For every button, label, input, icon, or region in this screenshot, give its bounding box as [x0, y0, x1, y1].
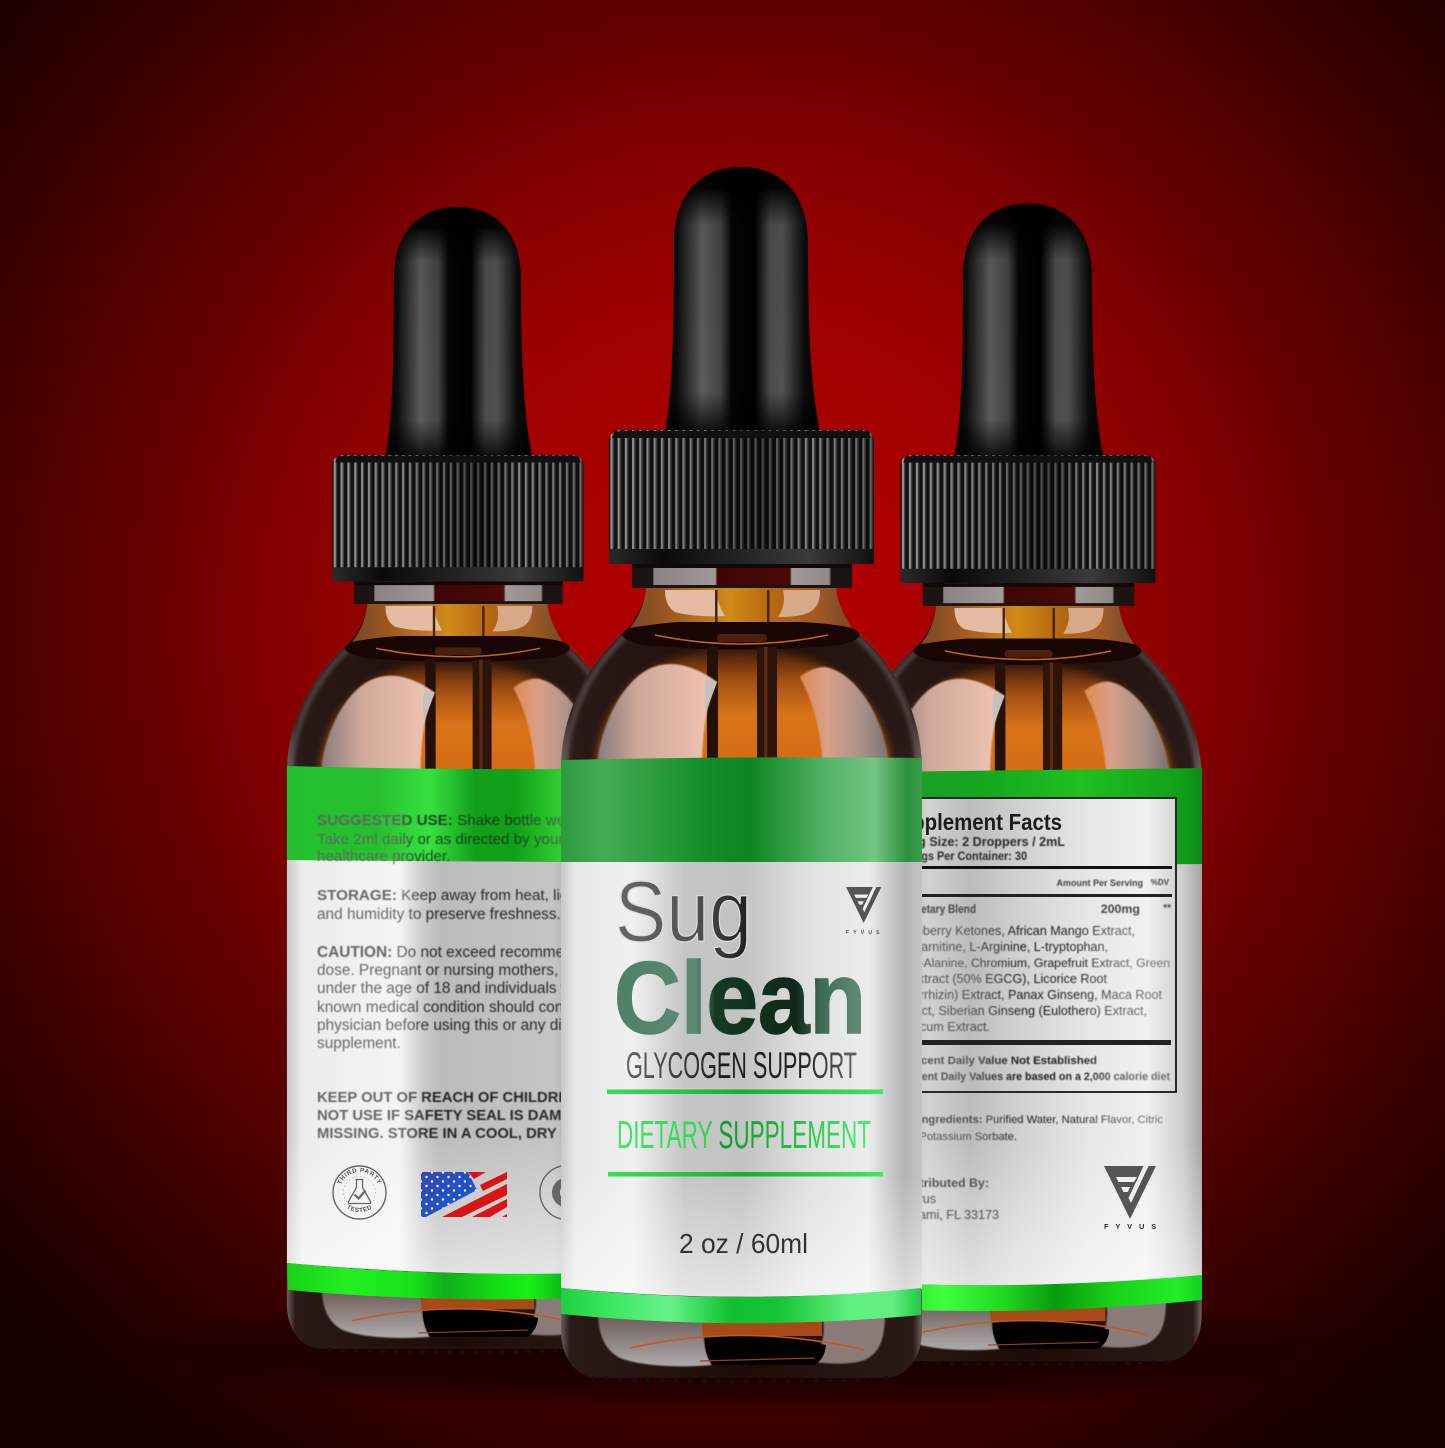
warning text: KEEP OUT OF REACH OF CHILDREN. DO — [317, 1090, 609, 1106]
center label: white body — [561, 862, 922, 1297]
product name: Sug: Sug — [615, 864, 752, 960]
subtitle: glycogen support: GLYCOGEN SUPPORT — [626, 1045, 857, 1086]
bottle: left, back label — [286, 207, 631, 1354]
warning text: MISSING. STORE IN A COOL, DRY PLACE. — [317, 1126, 615, 1142]
warning text — [317, 1090, 631, 1142]
serving information: Servings Per Container: 30 — [888, 849, 1027, 863]
center label: bottom band — [561, 1288, 921, 1323]
center glass and dropper — [561, 167, 922, 1382]
blend row: Dietary Blend — [911, 902, 976, 916]
blend row — [911, 902, 1171, 916]
suggested use text: healthcare provider. — [317, 848, 450, 865]
right glass and dropper — [854, 204, 1202, 1365]
other ingredients: Other ingredients: Purified Water, Natural Flavor, Citric — [886, 1114, 1163, 1126]
bottle: center, front label — [561, 167, 922, 1382]
suggested use text: Take 2ml daily or as directed by your — [317, 831, 563, 848]
icon: third party tested badge: TESTED — [348, 1204, 372, 1212]
left label: white body — [287, 860, 590, 1274]
ingredient list — [884, 924, 1170, 1034]
volume: 2 oz / 60ml — [679, 1228, 808, 1259]
daily value notes: Percent Daily Values are based on a 2,000 calorie diet — [899, 1071, 1170, 1083]
icon: third party tested badge: THIRD PARTY — [337, 1168, 382, 1184]
brand logo — [1104, 1165, 1163, 1231]
icon: gmp badge — [540, 1166, 594, 1220]
icon: gmp badge: G — [559, 1182, 575, 1204]
product name: Clean: Clean — [614, 941, 866, 1055]
distributor — [900, 1176, 999, 1222]
facts heading: Supplement Facts — [886, 809, 1062, 835]
ingredient list: Tea Extract (50% EGCG), Licorice Root — [886, 972, 1107, 986]
caution text: dose. Pregnant or nursing mothers, children — [317, 962, 616, 979]
left label: top band — [287, 766, 590, 862]
ingredient list: L-Carnitine, L-Arginine, L-tryptophan, — [901, 940, 1108, 954]
amount per serving header: Amount Per Serving — [1056, 878, 1143, 888]
distributor: Fyvus — [902, 1192, 936, 1206]
right label: bottom band — [880, 1275, 1202, 1311]
brand logo: FYVUS — [1104, 1222, 1163, 1231]
storage text: STORAGE: Keep away from heat, light — [317, 887, 582, 904]
serving information: Serving Size: 2 Droppers / 2mL — [880, 835, 1065, 849]
ingredient list: Beta-Alanine, Chromium, Grapefruit Extract, Green — [894, 956, 1170, 970]
suggested use text — [317, 812, 576, 865]
caution text — [317, 944, 616, 1052]
other ingredients — [886, 1114, 1163, 1143]
suggested use text: SUGGESTED USE: Shake bottle well. — [317, 812, 576, 829]
right label: white body — [880, 864, 1202, 1285]
ingredient list: (Glycyrrhizin) Extract, Panax Ginseng, Maca Root — [884, 988, 1162, 1002]
distributor: Miami, FL 33173 — [906, 1208, 999, 1222]
amount per serving header: %DV — [1151, 878, 1170, 887]
storage text: and humidity to preserve freshness. — [317, 906, 561, 923]
serving information — [880, 835, 1065, 863]
right label: top band — [880, 768, 1202, 866]
ingredient list: Raspberry Ketones, African Mango Extract, — [894, 924, 1135, 938]
dietary supplement: DIETARY SUPPLEMENT — [617, 1114, 871, 1157]
center label: top band — [561, 757, 922, 862]
bottle: right, supplement facts label — [854, 204, 1202, 1365]
caution text: supplement. — [317, 1035, 401, 1052]
daily value notes: Percent Daily Value Not Established — [903, 1055, 1097, 1067]
ingredient list: Capsicum Extract. — [888, 1020, 990, 1034]
blend row: 200mg — [1101, 902, 1140, 916]
distributor: Distributed By: — [900, 1176, 989, 1190]
brand logo: FYVUS — [846, 930, 884, 936]
icon: third party tested badge — [332, 1165, 387, 1220]
left glass and dropper — [287, 207, 629, 1352]
brand logo — [846, 886, 884, 936]
caution text: physician before using this or any dietary — [317, 1017, 596, 1034]
ingredient list: Extract, Siberian Ginseng (Eulothero) Extract, — [892, 1004, 1147, 1018]
supplement facts panel — [880, 798, 1176, 1092]
caution text: under the age of 18 and individuals with a — [317, 980, 602, 997]
daily value notes — [899, 1055, 1170, 1083]
warning text: NOT USE IF SAFETY SEAL IS DAMAGED OR — [317, 1108, 631, 1124]
other ingredients: Acid, Potassium Sorbate. — [891, 1131, 1017, 1143]
caution text: known medical condition should consult a — [317, 999, 601, 1016]
storage text — [317, 887, 582, 923]
blend row: ** — [1163, 903, 1171, 914]
icon: american flag — [421, 1172, 507, 1217]
caution text: CAUTION: Do not exceed recommended — [317, 944, 598, 961]
left label: bottom band — [287, 1263, 590, 1299]
floor shadow — [105, 1285, 1385, 1415]
